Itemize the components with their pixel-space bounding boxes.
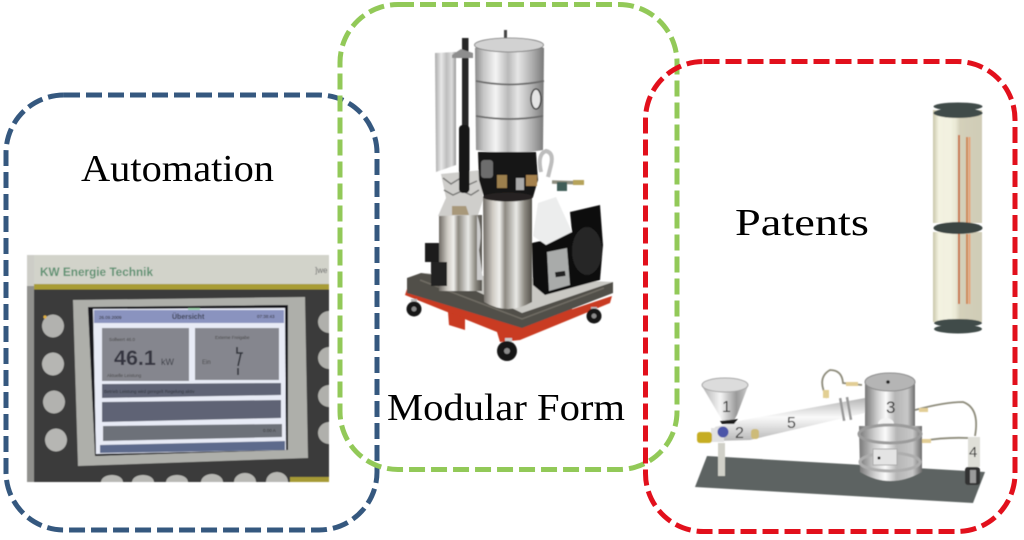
left steel cylinder xyxy=(439,215,482,291)
panel: modular form dashed border xyxy=(340,4,677,470)
diagram: patent apparatus xyxy=(695,370,985,503)
screen xyxy=(93,308,286,454)
diagram: patent apparatus: 4 xyxy=(969,444,977,461)
floor of cart xyxy=(407,273,613,314)
main drum xyxy=(504,30,507,38)
white tank xyxy=(533,197,572,245)
panel: automation dashed border xyxy=(6,95,377,530)
screen: Betrieb Leistung wird geregelt Regelung aktiv xyxy=(104,389,195,394)
bezel xyxy=(73,297,308,466)
wheels xyxy=(411,299,417,305)
heading: Patents: Patents xyxy=(735,202,869,244)
screen: kW xyxy=(161,357,174,367)
photo: control panel: ]we xyxy=(315,266,328,275)
bottom buttons xyxy=(101,472,288,482)
middle cap xyxy=(934,222,982,234)
screen: Ein xyxy=(202,360,211,366)
black exhaust pipe xyxy=(462,38,468,128)
part numbers: 1 xyxy=(722,399,731,416)
panel: patents dashed border xyxy=(646,62,1015,532)
diagram: patent apparatus: 2 xyxy=(735,425,744,442)
wires xyxy=(822,370,862,398)
heading: Automation: Automation xyxy=(81,148,274,190)
base plate xyxy=(695,456,985,503)
diagram: patent apparatus: 3 xyxy=(886,398,895,417)
screen: Externe Freigabe xyxy=(215,335,250,340)
diagram: tube reactor xyxy=(933,102,982,334)
vessel 4 xyxy=(968,437,980,467)
screen: Sollwert 46.0 xyxy=(109,337,136,342)
cart red frame xyxy=(405,289,612,342)
screen: 07:38:43 xyxy=(257,314,275,319)
photo: gasifier machine xyxy=(405,30,613,361)
cart grey frame xyxy=(407,273,613,328)
foil wrap xyxy=(438,170,483,216)
vertical duct xyxy=(435,52,456,172)
screen: Aktuelle Leistung xyxy=(107,373,142,378)
funnel 1 xyxy=(702,386,748,424)
screen: 0.00 A xyxy=(263,428,276,433)
heading: Modular Form: Modular Form xyxy=(387,387,625,429)
screen: 46.1 xyxy=(114,346,156,370)
photo: control panel: KW Energie Technik xyxy=(40,267,154,279)
screen: Übersicht xyxy=(172,312,205,321)
mid section pipes xyxy=(478,152,538,197)
control box xyxy=(425,243,439,262)
reactor 3 xyxy=(865,382,915,430)
top cap xyxy=(934,102,982,110)
side buttons xyxy=(42,314,64,338)
diagram: patent apparatus: 5 xyxy=(787,415,796,432)
screen: 26.09.2009 xyxy=(99,315,122,320)
leg xyxy=(718,443,725,476)
feeder parts xyxy=(711,428,724,442)
engine black block xyxy=(532,205,603,295)
sloped tube 5 xyxy=(715,398,865,441)
central steel cylinder xyxy=(483,197,532,309)
bottom cap xyxy=(934,319,982,327)
photo: control panel xyxy=(27,255,329,482)
